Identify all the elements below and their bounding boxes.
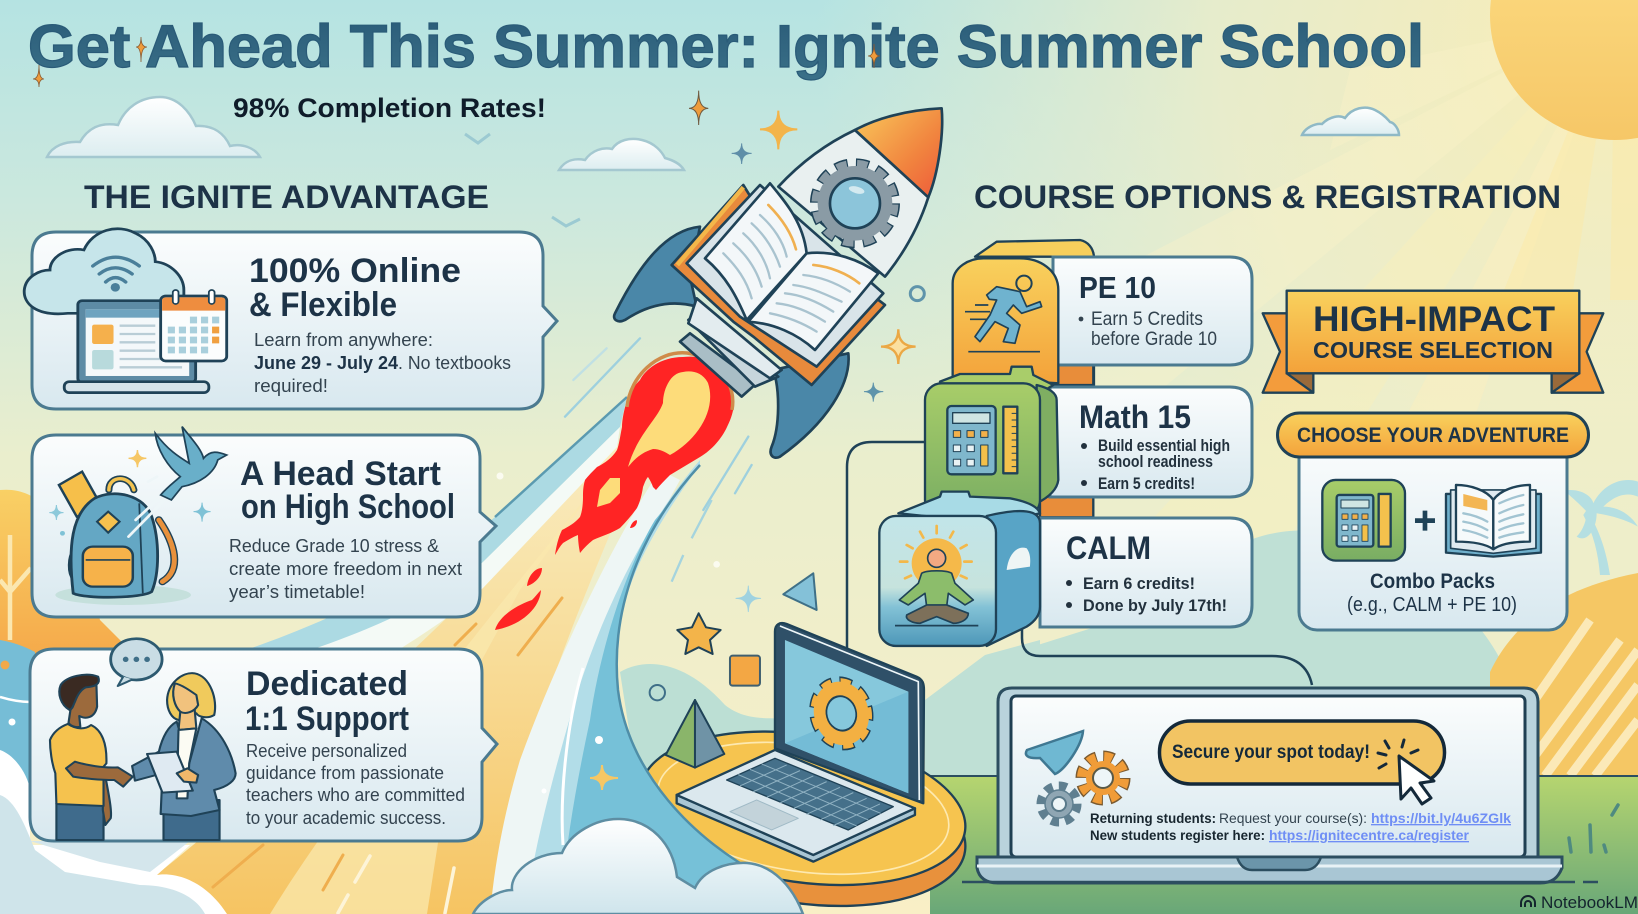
panel: Math 15 [1050,387,1252,497]
caption: Combo Packs [1370,570,1495,593]
banner: high-impact course selection [1263,291,1603,393]
banner: high-impact course selection: COURSE SELECTION [1313,337,1553,363]
icon: meditating person block [879,492,1040,646]
bullets: Earn 5 credits! [1098,474,1195,493]
panel: head start on high school [32,427,496,617]
body text: . No textbooks [398,353,511,373]
section heading: course options and registration: COURSE OPTIONS & REGISTRATION [974,179,1561,215]
palm tree silhouette [1566,480,1638,575]
left side scenery [0,490,140,800]
panel: dedicated 1:1 support [30,639,497,841]
gear on laptop screen [808,677,874,750]
bullets: Build essential high [1098,436,1230,455]
platform disc [631,712,975,914]
bullets: Earn 6 credits! [1083,574,1195,593]
course icon blocks [879,258,1058,646]
title sparkles [33,37,880,87]
fins [614,227,849,458]
heading: 100% Online [249,252,461,290]
body text: required! [254,376,328,396]
pill header: CHOOSE YOUR ADVENTURE [1297,424,1569,447]
registration links text: https://bit.ly/4u6ZGlk [1371,811,1512,826]
heading: PE 10 [1079,270,1156,305]
title: Get Ahead This Summer: Ignite Summer School [28,13,1424,80]
heading: A Head Start [240,455,441,493]
rocket with open book [614,108,942,458]
book [672,183,885,385]
section heading: the ignite advantage: THE IGNITE ADVANTAGE [84,179,489,215]
bottom center cloud [473,819,803,914]
heading [245,665,409,738]
panel: choose your adventure combo packs [1278,413,1588,630]
bullets [1081,436,1230,493]
button: secure your spot [1160,721,1444,784]
icon: cloud laptop calendar [24,229,227,393]
bullets: school readiness [1098,452,1213,471]
body text: create more freedom in next [229,559,462,579]
banner: high-impact course selection: HIGH-IMPACT [1313,300,1555,339]
laptop frame [962,688,1598,883]
heading: on High School [241,488,455,526]
completion rates callout: 98% Completion Rates! [233,93,546,123]
caption [1347,570,1517,616]
rocket trail streaks [150,397,627,914]
registration links text: Request your course(s): [1219,811,1367,826]
registration links text: New students register here: [1090,828,1265,843]
speed lines [565,338,752,510]
body text: to your academic success. [246,808,446,828]
heading [240,455,455,526]
body text [246,741,465,828]
icon: backpack and bird [49,427,227,605]
icon: running figure block [953,258,1058,383]
heading: Math 15 [1079,399,1191,435]
body text: Reduce Grade 10 stress & [229,536,439,556]
registration links text: Returning students: [1090,811,1216,826]
icon: mouse cursor with click marks [1378,740,1434,804]
rocket body [778,130,928,277]
body text [254,330,511,396]
background hills and ground [620,530,1638,914]
nose cone [855,108,942,197]
laptop on platform [677,623,924,862]
body text: Learn from anywhere: [254,330,433,350]
watermark: NotebookLM: NotebookLM [1541,893,1638,912]
flame [495,353,734,630]
gear porthole [816,164,894,243]
bullets: Done by July 17th! [1083,596,1227,615]
bullets [1066,574,1227,615]
decorative clouds in sky [47,97,1399,226]
icon: calculator and ruler block [925,367,1058,517]
panel: 100% online and flexible [24,229,557,409]
connector frames behind courses [847,442,1312,685]
caption: (e.g., CALM + PE 10) [1347,594,1517,616]
floating shapes near laptop [650,500,817,768]
pill header [1278,413,1588,457]
registration links text [1090,811,1512,843]
panel: PE 10 [1053,257,1252,365]
body text: teachers who are committed [246,785,465,805]
nozzle [680,298,782,397]
bullets [1079,309,1217,350]
blue rocket swoosh [490,460,770,914]
heading: CALM [1066,530,1151,566]
heading: Dedicated [246,665,408,703]
body text: June 29 - July 24 [254,353,398,373]
registration laptop panel [962,688,1598,883]
icon: calculator plus book [1322,480,1541,561]
button: secure your spot: Secure your spot today! [1172,742,1370,763]
panel: CALM [1040,518,1252,627]
sun with rays [1000,0,1638,680]
body text: year’s timetable! [229,582,365,602]
icon: two people shaking hands [50,639,236,840]
course block back tab and orange connectors [975,240,1094,517]
heading: 1:1 Support [245,700,409,738]
bullets: Earn 5 Credits [1091,309,1203,330]
body text [229,536,462,602]
heading: & Flexible [249,286,397,324]
sparkles around rocket [689,91,924,402]
heading [249,252,461,324]
registration links text: https://ignitecentre.ca/register [1269,828,1470,843]
body text: guidance from passionate [246,763,444,783]
bullets: before Grade 10 [1091,329,1217,350]
bottom left cloud [0,750,227,914]
body text: Receive personalized [246,741,407,761]
icon: paper plane and gears [1026,731,1124,821]
